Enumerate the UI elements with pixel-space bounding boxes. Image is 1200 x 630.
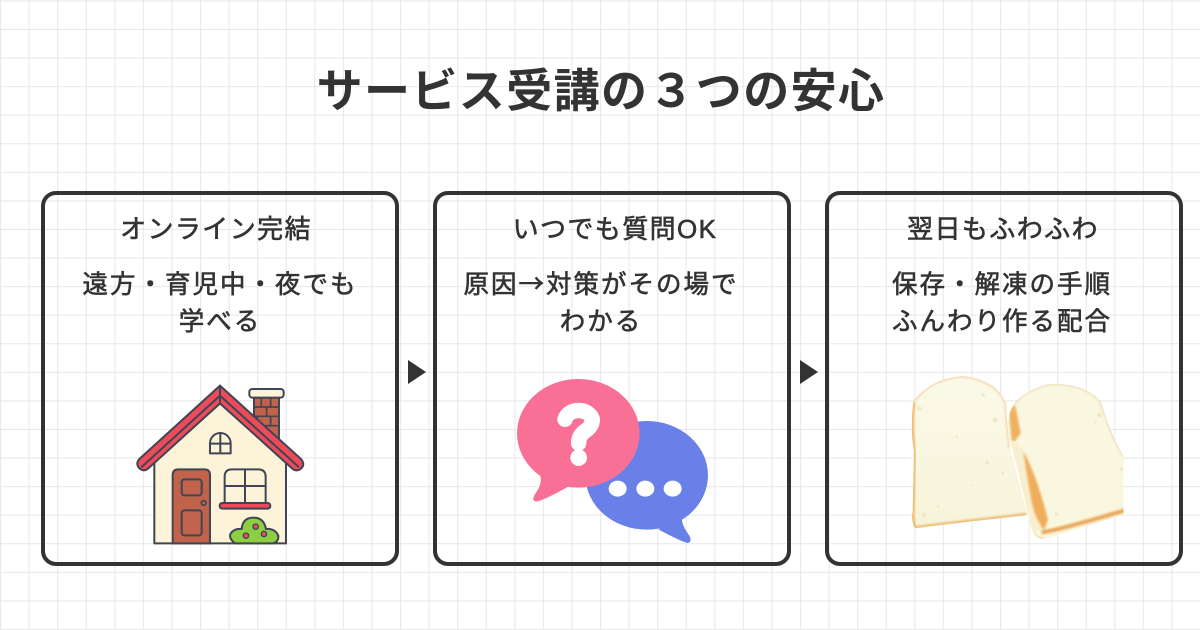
text: bread: ふんわり作る配合 <box>892 308 1112 336</box>
left slice <box>912 376 1028 528</box>
icon: speech bubbles <box>517 379 708 543</box>
heading: online: オンライン完結 <box>120 214 312 244</box>
roof <box>137 386 303 470</box>
bush <box>230 518 278 543</box>
text: questions <box>463 264 739 336</box>
pink bubble <box>517 379 640 502</box>
heading: questions: いつでも質問OK <box>513 214 717 244</box>
panel: bread <box>825 191 1183 566</box>
panel: questions <box>433 191 791 566</box>
text: online: 学べる <box>179 308 261 336</box>
text: online <box>82 270 358 336</box>
arrow 1 <box>408 360 426 384</box>
text: bread <box>892 270 1112 336</box>
image: bread slices <box>907 372 1127 542</box>
title: サービス受講の３つの安心 <box>317 65 885 117</box>
text: bread: 保存・解凍の手順 <box>892 271 1112 299</box>
wall <box>154 403 286 543</box>
attic window <box>210 433 231 453</box>
blue bubble <box>585 421 708 543</box>
chimney <box>249 389 284 440</box>
text: online: 遠方・育児中・夜でも <box>82 271 358 299</box>
panel: online <box>41 191 399 566</box>
icon: house <box>137 386 303 543</box>
heading: bread: 翌日もふわふわ <box>907 214 1099 244</box>
text: questions: わかる <box>560 308 642 336</box>
right slice <box>1008 384 1124 540</box>
arrow 2 <box>800 360 818 384</box>
door <box>173 469 210 543</box>
text: questions: 原因→対策がその場で <box>463 264 739 301</box>
window <box>225 469 266 503</box>
